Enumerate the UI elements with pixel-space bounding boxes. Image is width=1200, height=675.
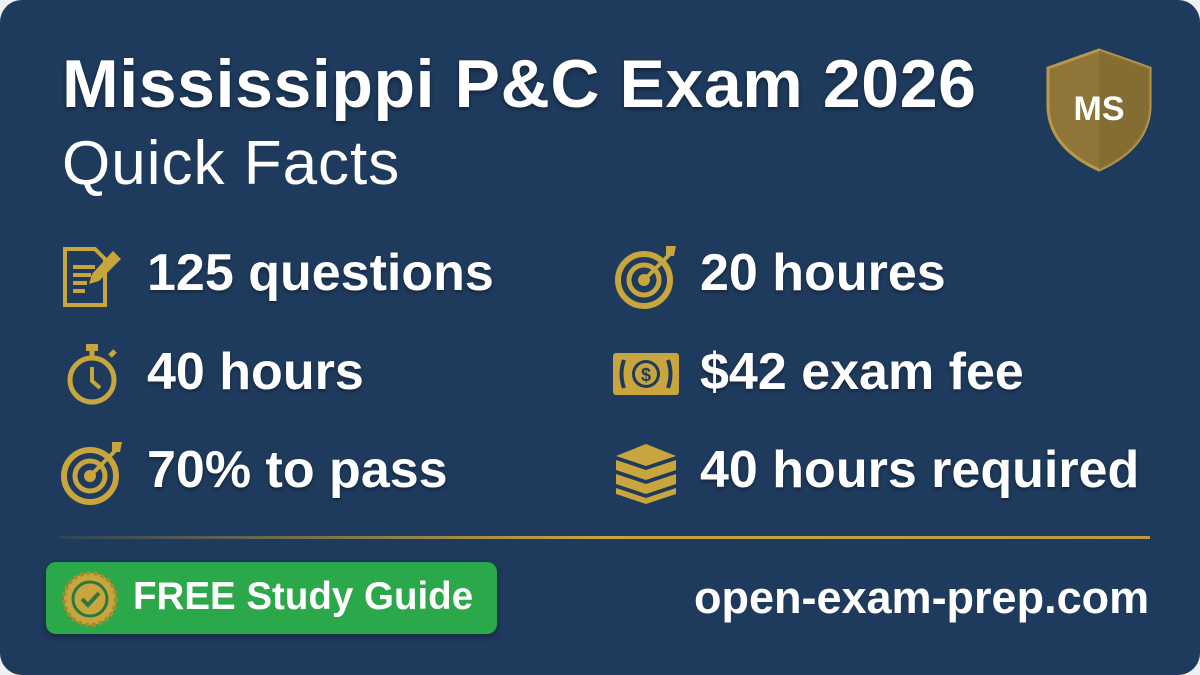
fact: pass: 70% to pass — [147, 441, 448, 499]
website url: open-exam-prep.com — [694, 572, 1149, 623]
icon: document — [63, 247, 121, 307]
button: free study guide: FREE Study Guide — [133, 575, 473, 618]
icon: target — [61, 442, 122, 505]
button: free study guide — [46, 562, 497, 634]
fact: questions: 125 questions — [147, 244, 494, 302]
fact: hours — [68, 343, 364, 404]
icon: MS shield: MS — [1074, 90, 1124, 128]
fact: 20 houres: 20 houres — [700, 244, 946, 302]
icon: target — [615, 246, 676, 309]
fact: hours: 40 hours — [147, 343, 364, 401]
icon: MS shield — [1046, 48, 1152, 172]
icon: badge check — [62, 571, 118, 627]
divider — [60, 536, 1150, 539]
icon: money: $ — [641, 365, 651, 385]
fact: exam fee: $42 exam fee — [700, 343, 1024, 401]
title: Mississippi P&C Exam 2026 — [62, 46, 977, 122]
subtitle: Quick Facts — [62, 129, 400, 198]
fact: hours required: 40 hours required — [700, 441, 1139, 499]
icon: books — [616, 444, 676, 504]
fact: 20 houres — [615, 244, 946, 309]
icon: money — [613, 353, 679, 395]
icon: stopwatch — [68, 344, 117, 404]
